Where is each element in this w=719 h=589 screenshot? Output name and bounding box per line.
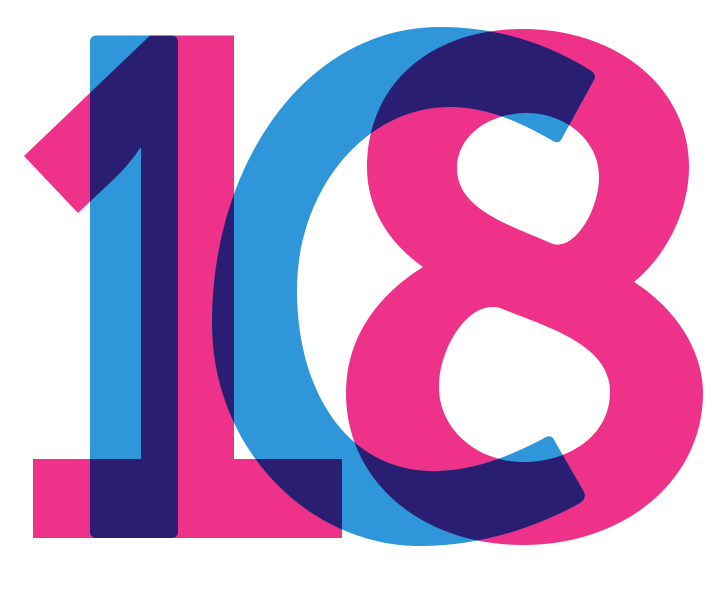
pink numeral eight bbox=[346, 29, 703, 545]
dark navy overlap of pink and blue shapes bbox=[90, 32, 595, 540]
blue letter C bbox=[212, 27, 595, 546]
blue letter I bbox=[90, 36, 178, 538]
pink numeral one bbox=[24, 36, 342, 538]
